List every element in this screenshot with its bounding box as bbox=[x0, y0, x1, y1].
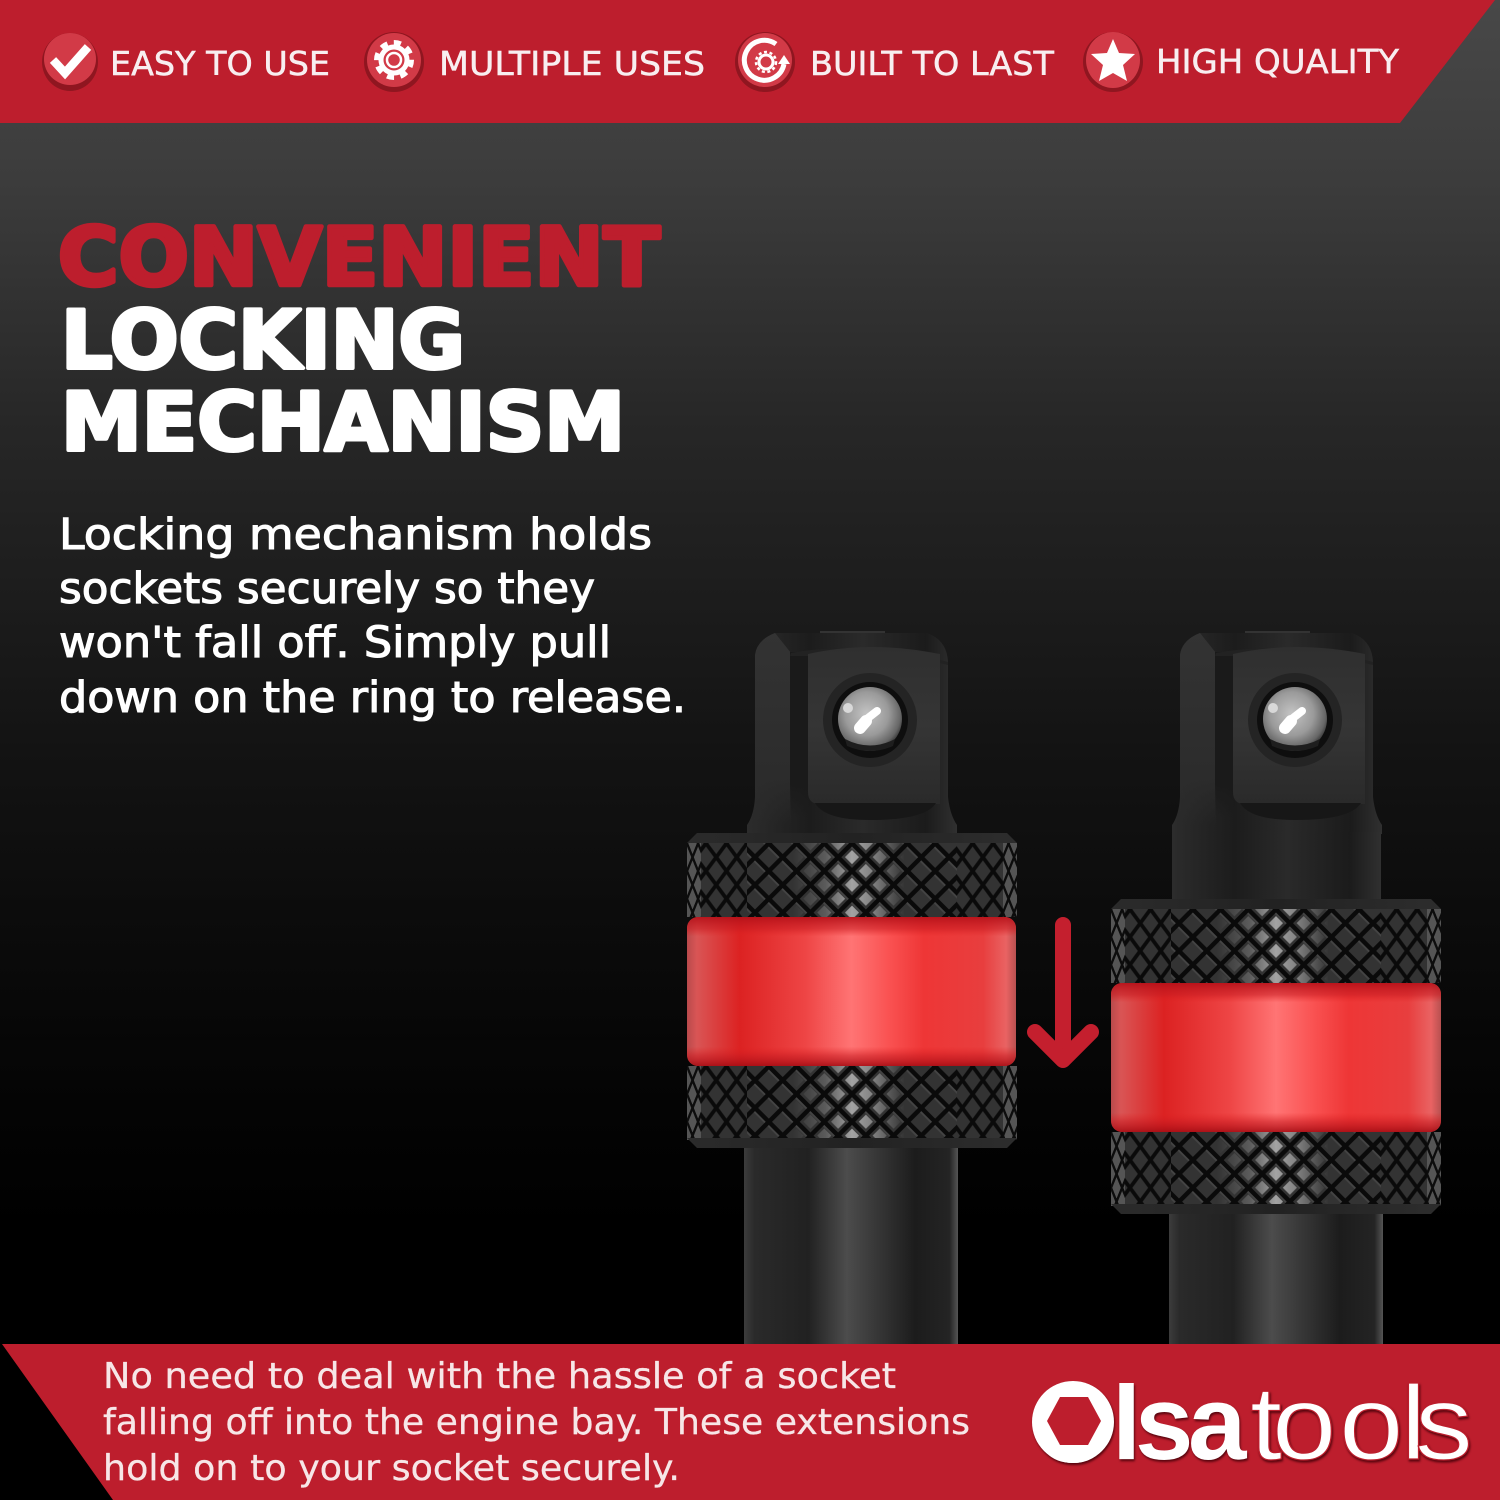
neck bbox=[1172, 832, 1381, 902]
heading bbox=[58, 211, 660, 469]
feature: built to last bbox=[735, 32, 1055, 92]
banner text: hold on to your socket securely. bbox=[103, 1448, 680, 1489]
red ring bbox=[687, 917, 1016, 1066]
upper knurled collar bbox=[687, 833, 1017, 917]
label: easy to use: EASY TO USE bbox=[110, 44, 330, 83]
shaft bbox=[744, 1146, 958, 1344]
body text: won't fall off. Simply pull bbox=[59, 618, 611, 668]
icon: gear badge bbox=[364, 32, 424, 92]
tool: locked extension (left) bbox=[687, 631, 1017, 1344]
top feature banner bbox=[0, 0, 1495, 123]
heading line: locking: LOCKING bbox=[61, 294, 465, 387]
square drive head with ball bbox=[747, 631, 957, 834]
label: multiple uses: MULTIPLE USES bbox=[439, 44, 705, 83]
heading line: convenient: CONVENIENT bbox=[58, 211, 660, 304]
banner text: falling off into the engine bay. These extensions bbox=[103, 1402, 970, 1443]
logo: Olsatools bbox=[1032, 1363, 1473, 1486]
lower knurled collar bbox=[1111, 1132, 1441, 1214]
logo: Olsatools: O bbox=[1032, 1363, 1114, 1486]
feature: multiple uses bbox=[364, 32, 705, 92]
banner text bbox=[103, 1356, 970, 1489]
feature: high quality bbox=[1083, 32, 1400, 92]
icon: cycle gear badge bbox=[735, 32, 795, 92]
arrow: pull ring down bbox=[1035, 925, 1091, 1060]
label: built to last: BUILT TO LAST bbox=[810, 44, 1055, 83]
logo: Olsatools: lsa bbox=[1112, 1365, 1248, 1482]
square drive head with ball bbox=[1172, 631, 1382, 834]
body text bbox=[59, 510, 686, 723]
label: high quality: HIGH QUALITY bbox=[1156, 42, 1400, 81]
shaft bbox=[1169, 1212, 1383, 1344]
icon: check badge bbox=[42, 33, 98, 91]
logo: Olsatools: tools bbox=[1250, 1365, 1473, 1482]
heading line: mechanism: MECHANISM bbox=[61, 376, 625, 469]
tool: released extension (right) bbox=[1111, 631, 1441, 1344]
lower knurled collar bbox=[687, 1066, 1017, 1148]
red ring bbox=[1111, 983, 1441, 1132]
feature: easy to use bbox=[42, 33, 330, 91]
icon: star badge bbox=[1083, 32, 1143, 92]
bottom banner bbox=[2, 1344, 1500, 1500]
upper knurled collar bbox=[1111, 899, 1441, 983]
body text: Locking mechanism holds bbox=[59, 510, 652, 560]
body text: sockets securely so they bbox=[59, 564, 595, 614]
banner text: No need to deal with the hassle of a socket bbox=[103, 1356, 896, 1397]
body text: down on the ring to release. bbox=[59, 673, 686, 723]
